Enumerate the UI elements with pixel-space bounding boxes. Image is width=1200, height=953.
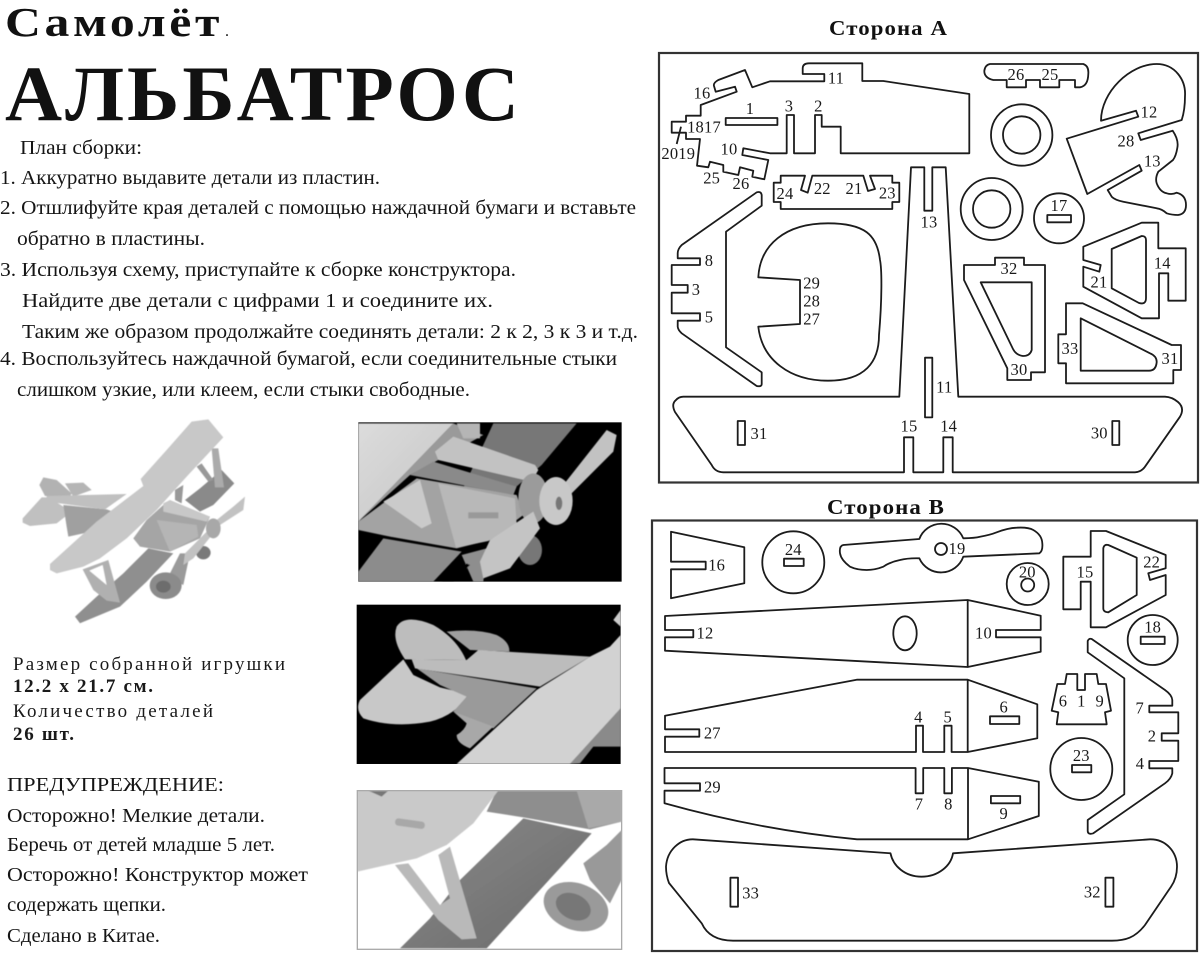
side B part numbers: 22	[1143, 552, 1160, 571]
side A part numbers: 8	[705, 251, 713, 270]
side B part numbers: 10	[975, 623, 992, 642]
side A part numbers	[661, 65, 1178, 443]
warning text: ПРЕДУПРЕЖДЕНИЕ:	[7, 774, 224, 796]
part: wing 12-10	[665, 600, 1041, 667]
side A part numbers: 33	[1062, 339, 1078, 358]
title	[5, 0, 522, 137]
assembly instructions: 1. Аккуратно выдавите детали из пластин.	[0, 167, 380, 189]
side B part numbers: 6	[999, 697, 1008, 716]
side B part numbers: 18	[1144, 618, 1161, 637]
side A part numbers: 25	[703, 168, 720, 187]
side A part numbers: 21	[1091, 272, 1107, 291]
side A part numbers: 3	[785, 96, 793, 115]
side A part numbers: 22	[814, 179, 831, 198]
side B part numbers: 6	[1059, 692, 1067, 711]
warning text: Сделано в Китае.	[7, 925, 160, 947]
part: frame 32-30	[964, 258, 1045, 380]
assembly instructions: 2. Отшлифуйте края деталей с помощью наждачной бумаги и вставьте	[0, 197, 636, 219]
specifications text: Размер собранной игрушки	[13, 654, 285, 675]
side B part numbers	[697, 539, 1161, 902]
side B part numbers: 4	[1136, 754, 1144, 773]
part: strut 24-23	[774, 176, 899, 209]
side A part numbers: 26	[733, 174, 749, 193]
assembly instructions	[0, 137, 638, 401]
side A part numbers: 25	[1042, 65, 1058, 84]
photo: assembled biplane	[23, 419, 245, 623]
side A part numbers: 1	[746, 99, 754, 118]
part: propeller 19	[840, 524, 1042, 572]
side B part numbers: 1	[1077, 692, 1086, 711]
part: wing 29-9	[664, 768, 1039, 839]
side A part numbers: 27	[803, 309, 820, 328]
side B part numbers: 8	[944, 794, 953, 813]
side B part numbers: 23	[1073, 746, 1090, 765]
part: undercarriage 7-2-4	[1088, 639, 1178, 834]
side A part numbers: 1817	[687, 118, 721, 137]
side A part numbers: 28	[1118, 132, 1134, 151]
side A part numbers: 30	[1011, 360, 1027, 379]
side B part numbers: 9	[999, 804, 1008, 823]
side A part numbers: 2	[814, 96, 823, 115]
warning text: Беречь от детей младше 5 лет.	[7, 834, 275, 856]
part: top wing 33-32	[666, 839, 1177, 941]
part: bar 26-25	[984, 64, 1088, 87]
side A part numbers: 31	[751, 424, 767, 443]
part: fin 16	[671, 532, 744, 598]
side A part numbers: 30	[1091, 423, 1108, 442]
specifications text	[13, 654, 285, 745]
assembly instructions: слишком узкие, или клеем, если стыки свободные.	[17, 379, 470, 401]
side B part numbers: 24	[785, 540, 802, 559]
side B part numbers: 7	[1135, 698, 1144, 717]
assembly instructions: Таким же образом продолжайте соединять детали: 2 к 2, 3 к 3 и т.д.	[22, 321, 638, 343]
side A part numbers: 3	[692, 280, 700, 299]
side B part numbers: 7	[915, 794, 923, 813]
side A part numbers: 28	[803, 292, 820, 311]
side A part numbers: 13	[921, 212, 937, 231]
side A part numbers: 15	[901, 417, 917, 436]
side A part numbers: 14	[940, 417, 957, 436]
side B part numbers: 33	[742, 883, 759, 902]
side A part numbers: 11	[936, 378, 952, 397]
photo: lower wing and wheel close-up	[357, 791, 622, 949]
side B part numbers: 20	[1019, 562, 1036, 581]
side A part numbers: 29	[803, 274, 820, 293]
part: panel 29-28-27	[758, 223, 881, 381]
side A part numbers: 17	[1051, 196, 1067, 215]
side A part numbers: 23	[879, 183, 896, 202]
assembly instructions: План сборки:	[20, 137, 142, 159]
side B part numbers: 5	[943, 707, 952, 726]
assembly instructions: Найдите две детали с цифрами 1 и соедините их.	[22, 290, 493, 312]
side A part numbers: 32	[1001, 259, 1017, 278]
side A part numbers: 5	[705, 308, 713, 327]
part: disc 24	[762, 531, 824, 593]
part: frame 33-31	[1058, 303, 1181, 383]
side B part numbers: 2	[1148, 727, 1156, 746]
side B part numbers: 15	[1077, 562, 1093, 581]
side A part numbers: 2019	[661, 144, 695, 163]
assembly instructions: обратно в пластины.	[17, 228, 205, 250]
side A part numbers: 10	[721, 140, 737, 159]
assembly instructions: 3. Используя схему, приступайте к сборке конструктора.	[0, 259, 516, 281]
side A part numbers: 11	[828, 68, 844, 87]
side B part numbers: 32	[1084, 882, 1101, 901]
part: bracket 6-1-9	[1052, 674, 1111, 724]
panel: side B parts sheet	[652, 520, 1197, 951]
assembly instructions: 4. Воспользуйтесь наждачной бумагой, если соединительные стыки	[0, 348, 617, 370]
part: rings and discs	[961, 104, 1084, 243]
title: АЛЬБАТРОС	[5, 50, 522, 137]
side A part numbers: 12	[1141, 103, 1157, 122]
side A part numbers: 16	[694, 83, 710, 102]
part: frame 15-22	[1063, 531, 1166, 627]
title: Самолёт	[5, 0, 223, 45]
part: wing 27-6	[665, 680, 1037, 752]
warning text: содержать щепки.	[7, 894, 166, 916]
side A part numbers: 31	[1162, 349, 1178, 368]
warning text	[7, 774, 308, 947]
part: undercarriage 8-3-5	[672, 192, 762, 386]
warning text: Осторожно! Мелкие детали.	[7, 805, 265, 827]
side A part numbers: 21	[846, 179, 862, 198]
side B part numbers: 16	[708, 555, 725, 574]
side A part numbers: 26	[1008, 65, 1024, 84]
specifications text: Количество деталей	[13, 701, 213, 722]
side B part numbers: 29	[704, 777, 721, 796]
side A part numbers: 13	[1144, 152, 1161, 171]
side B part numbers: 27	[704, 723, 721, 742]
side B part numbers: 12	[697, 623, 713, 642]
heading: side B: Сторона В	[827, 495, 945, 519]
side B part numbers: 9	[1095, 692, 1104, 711]
panel: side A parts sheet	[659, 53, 1198, 482]
part: frame 21-14	[1083, 223, 1186, 318]
heading: side A: Сторона А	[829, 16, 948, 40]
specifications text: 12.2 x 21.7 см.	[13, 676, 153, 697]
photo: tail close-up	[357, 605, 621, 764]
part: discs 23-18-20	[1007, 563, 1178, 800]
side A part numbers: 14	[1154, 253, 1171, 272]
side B part numbers: 4	[914, 707, 923, 726]
part: lower wing with spine	[673, 167, 1182, 472]
title: .	[225, 23, 229, 40]
specifications text: 26 шт.	[13, 724, 74, 745]
part: fuselage side	[672, 63, 969, 179]
part: tail 12-28-13	[1067, 64, 1186, 215]
photo: engine and propeller close-up	[358, 422, 622, 582]
side B part numbers: 19	[949, 539, 965, 558]
warning text: Осторожно! Конструктор может	[7, 864, 308, 886]
side A part numbers: 24	[777, 184, 793, 203]
